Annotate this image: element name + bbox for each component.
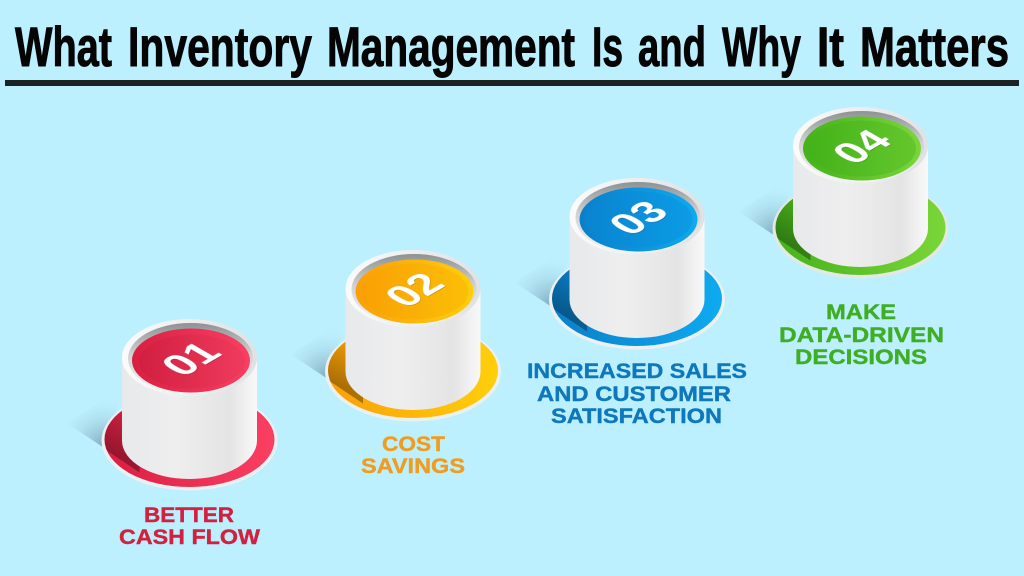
step 1: better cash flow <box>68 319 278 549</box>
number 02: 02 <box>373 266 455 313</box>
title: Why <box>722 15 801 78</box>
label 02: SAVINGS <box>361 454 465 478</box>
label 03: AND CUSTOMER <box>537 382 732 406</box>
label 03: INCREASED SALES <box>527 359 747 383</box>
step 3: increased sales and customer satisfaction <box>515 178 747 428</box>
label 01: BETTER <box>144 503 234 527</box>
label 02: COST <box>382 432 445 456</box>
title: It <box>817 15 844 78</box>
title: Inventory <box>128 15 312 78</box>
step 2: cost savings <box>291 250 501 478</box>
title: Management <box>327 15 575 78</box>
label 01 <box>119 503 261 549</box>
title underline <box>5 80 1019 86</box>
title: and <box>638 15 706 78</box>
label 04: MAKE <box>826 300 896 324</box>
step 4: make data-driven decisions <box>738 107 948 369</box>
pedestal 01 <box>68 319 278 490</box>
label 03: SATISFACTION <box>551 404 722 428</box>
label 01: CASH FLOW <box>119 525 261 549</box>
label 04: DATA-DRIVEN <box>779 323 944 347</box>
title: What <box>15 15 112 78</box>
title: Is <box>592 15 623 78</box>
number 04: 04 <box>821 123 903 170</box>
number 03: 03 <box>597 194 679 241</box>
label 04: DECISIONS <box>795 345 927 369</box>
pedestal 02 <box>291 250 501 422</box>
label 02 <box>361 432 465 478</box>
label 03 <box>527 359 747 428</box>
label 04 <box>779 300 944 369</box>
pedestal 03 <box>515 178 725 350</box>
title <box>15 15 1009 78</box>
number 01: 01 <box>150 335 231 382</box>
pedestal 04 <box>738 107 948 278</box>
